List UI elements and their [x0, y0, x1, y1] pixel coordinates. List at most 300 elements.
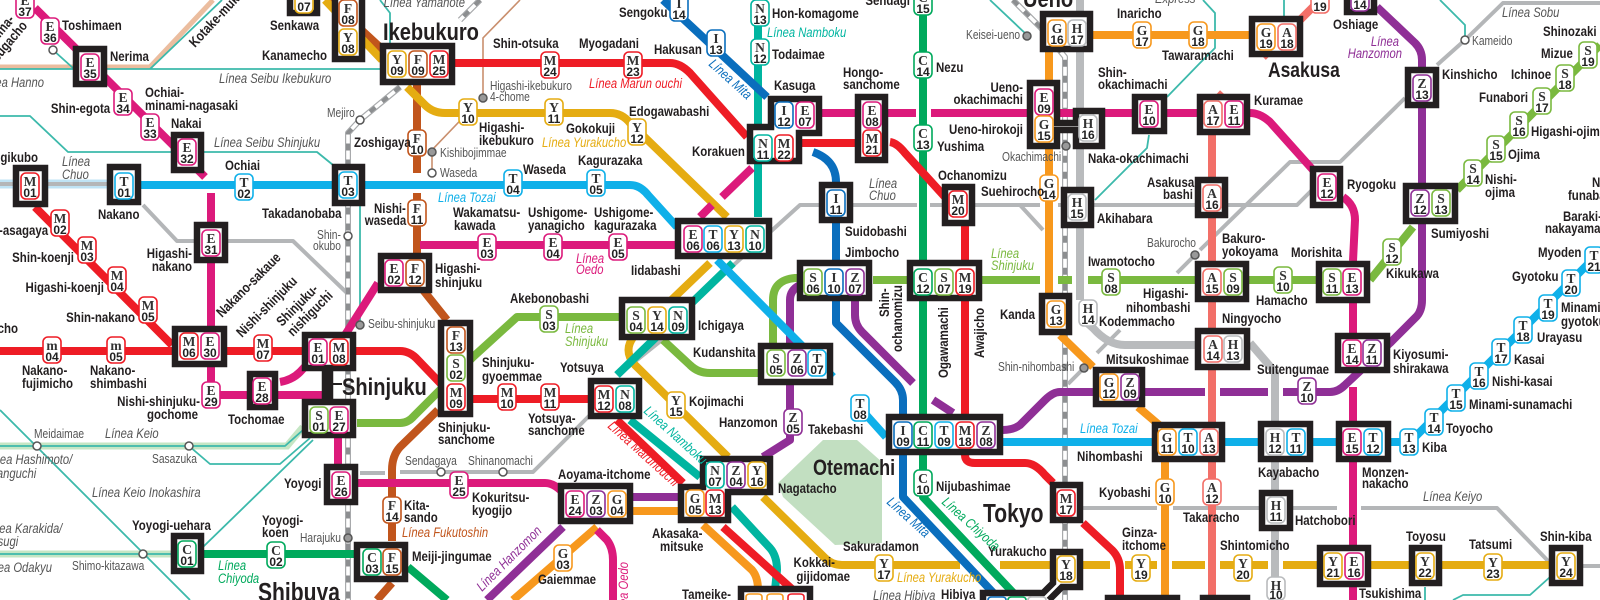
badge M11: 11: [544, 397, 557, 411]
station: Ikebukuro: 09: [411, 64, 425, 78]
badge E25: E: [454, 473, 464, 488]
badge F10: F: [413, 131, 421, 146]
name Mizue: Mizue: [1541, 45, 1573, 61]
name Ginza-itchome: [1122, 524, 1166, 553]
badge H14: H: [1083, 301, 1094, 316]
station badges: Nagatacho and Akasaka-mitsuke: Z: [731, 463, 741, 478]
name Shinozaki: Shinozaki: [1543, 23, 1597, 39]
badge C10: C: [918, 471, 928, 486]
name Sengoku: Sengoku: [619, 4, 667, 20]
station: Shin-okachimachi: E: [1144, 102, 1154, 117]
station: Kuramae: 11: [1228, 114, 1241, 128]
thin line station dots: [33, 32, 1469, 558]
name Awajicho: Awajicho: [971, 308, 987, 358]
station: Takadanobaba: 03: [341, 185, 355, 199]
line label Karakida: [0, 521, 64, 549]
station: Aoyama-itchome: 03: [589, 504, 603, 518]
station: Tsukishima: 16: [1347, 566, 1361, 580]
station badges: Korakuen and Kasuga: I: [781, 103, 787, 118]
name Takaracho: Takaracho: [1183, 509, 1240, 525]
badge G17: [1133, 22, 1151, 49]
station: Sumiyoshi: S: [1437, 191, 1445, 206]
badge T19: T: [1543, 296, 1553, 311]
badge M23: 23: [626, 65, 640, 79]
minor Shin-okubo: okubo: [313, 240, 341, 253]
line label Shinjuku centre: Shinjuku: [565, 334, 608, 349]
line label Seibu Shinjuku: Línea Seibu Shinjuku: [214, 135, 320, 150]
name Tokyo big: Tokyo: [983, 499, 1044, 527]
station: Ikebukuro: [383, 46, 452, 82]
station: Hongo-sanchome: M: [866, 131, 879, 146]
name Shinjuku-sanchome: [438, 419, 495, 447]
station: Ichigaya: 14: [650, 320, 664, 334]
name Gaiemmae: Gaiemmae: [538, 571, 596, 587]
badge T21: T: [1589, 248, 1599, 263]
station: Morishita: E: [1347, 270, 1357, 285]
badge T17: 17: [1494, 352, 1508, 366]
badge Y19: Y: [1136, 556, 1146, 571]
name Iidabashi: Iidabashi: [631, 262, 681, 278]
station: Otemachi: C: [918, 423, 928, 438]
name Ochiai-minami-nagasaki: minami-nagasaki: [145, 97, 238, 113]
name Ushigome-kagurazaka: [594, 204, 657, 233]
badge M02: M: [54, 211, 67, 226]
minor Shin-okubo: [313, 229, 341, 253]
station: Higashi-shinjuku: 02: [387, 273, 401, 287]
station: Tokyo: M: [1060, 491, 1073, 506]
station badges: Shinjuku: M: [333, 340, 346, 355]
badge S19: 19: [1581, 55, 1595, 69]
badge Y11: [545, 99, 563, 126]
minor Okachimachi: Okachimachi: [1002, 151, 1061, 164]
station: Aoyama-itchome: [561, 486, 630, 521]
line label Hanzomon east: Línea: [1371, 34, 1399, 49]
name Todaimae: Todaimae: [772, 46, 825, 62]
station: Kayabacho: [1261, 424, 1310, 459]
station: Hatchobori: 11: [1270, 510, 1283, 524]
name Higashi-shinjuku: shinjuku: [435, 274, 482, 290]
station: Jimbocho: 07: [848, 282, 862, 296]
station badges: Shinjuku: 27: [332, 420, 346, 434]
name Shin-egota: Shin-egota: [51, 100, 111, 116]
badge F10: 10: [410, 143, 424, 157]
station badges: Shinjuku: 08: [332, 352, 346, 366]
name Nishi-ojima: Nishi-: [1485, 171, 1517, 187]
station badges: Korakuen and Kasuga: E: [800, 103, 810, 118]
name Jimbocho: Jimbocho: [845, 244, 899, 260]
name Kasai: Kasai: [1514, 351, 1545, 367]
station: Kuramae: A: [1208, 102, 1218, 117]
station: Meiji-jingumae: C: [367, 550, 377, 565]
station: Ryogoku: E: [1322, 175, 1332, 190]
station: Aoyama-itchome: G: [612, 492, 623, 507]
station: Mitsukoshimae: Z: [1125, 375, 1135, 390]
badge M02: 02: [53, 223, 67, 237]
badge S08: 08: [1104, 282, 1118, 296]
name Monzen-nakacho: Monzen-: [1362, 464, 1409, 480]
Fukutoshin line: [329, 0, 447, 600]
badge T04: T: [508, 171, 518, 186]
station: Ginza: [1108, 598, 1177, 600]
line label Tozai west: Línea Tozai: [438, 190, 497, 205]
name Nakano-sakaue: Nakano-sakaue: [213, 249, 284, 320]
badge m04: 04: [45, 350, 59, 364]
badge Z05: Z: [788, 410, 798, 425]
station: Nakano: [110, 167, 138, 202]
station badges: Korakuen and Kasuga: M: [778, 136, 791, 151]
station: Iidabashi: 06: [686, 239, 700, 253]
line label Tozai east: Línea Tozai: [1080, 421, 1139, 436]
name Ushigome-kagurazaka: Ushigome-: [594, 204, 653, 220]
badge T21: [1585, 247, 1600, 274]
badge F11: [408, 200, 426, 227]
station: Kuramae: 17: [1206, 114, 1220, 128]
name Shinjuku-gyoemmae: Shinjuku-: [482, 354, 534, 370]
badge Y10: [459, 99, 477, 126]
badge S14: [1464, 160, 1482, 187]
Ueno-okachimachi interchange frame: [1030, 83, 1102, 146]
station: Iidabashi: E: [688, 227, 698, 242]
badge E05: E: [613, 235, 623, 250]
name Nakano: Nakano: [98, 206, 140, 222]
badge M10: [498, 384, 516, 411]
station: Iidabashi: Y: [729, 227, 739, 242]
badge T05: T: [591, 171, 601, 186]
name Shin-ochanomizu: Shin-: [876, 288, 892, 317]
station: Shinjuku-sanchome: F: [452, 328, 460, 343]
station: Kanda: G: [1051, 302, 1062, 317]
Hibiya line: [1080, 0, 1275, 600]
minor Kameido: Kameido: [1472, 35, 1512, 48]
badge T08: T: [855, 396, 865, 411]
minor Sendagaya: Sendagaya: [405, 455, 457, 468]
name Korakuen: Korakuen: [692, 143, 745, 159]
line label Shinjuku east: [991, 246, 1034, 273]
station: Ikebukuro: 09: [390, 64, 404, 78]
name Takadanobaba: Takadanobaba: [262, 205, 342, 221]
station: Nerima: [76, 49, 104, 84]
badge m04: m: [46, 338, 58, 353]
Shinjuku station connector tick: [330, 383, 342, 385]
badge E29: [202, 382, 220, 409]
name Higashi-koenji: Higashi-koenji: [26, 279, 104, 295]
name Tochomae: Tochomae: [228, 411, 285, 427]
station: Kanamecho: 08: [341, 13, 355, 27]
station: Nakai: [174, 135, 201, 170]
station: Iidabashi: 10: [748, 239, 762, 253]
name Higashi-nihombashi: Higashi-: [1143, 285, 1188, 301]
Namboku line: [617, 0, 777, 590]
name Kasuga: Kasuga: [774, 77, 816, 93]
badge M10: M: [501, 385, 514, 400]
station: Iidabashi: N: [750, 227, 760, 242]
minor Higashi-ikebukuro 4-chome: 4-chome: [490, 91, 530, 104]
line label Hanzomon east: Hanzomon: [1348, 46, 1402, 61]
badge Z10: 10: [1300, 391, 1314, 405]
line label Chiyoda west: Línea: [218, 558, 246, 573]
station: Senkawa: [290, 0, 317, 14]
station: Kanda: 13: [1049, 314, 1063, 328]
station: Ningyocho: 13: [1226, 349, 1240, 363]
name Shintomicho: Shintomicho: [1220, 537, 1290, 553]
badge T13: 13: [1402, 442, 1416, 456]
badge Y12: [628, 119, 646, 146]
badge M23: M: [627, 53, 640, 68]
station: Monzen-nakacho: 15: [1345, 442, 1359, 456]
name Nakano-shimbashi: shimbashi: [90, 375, 147, 391]
station badges: Nagatacho and Akasaka-mitsuke: N: [710, 463, 720, 478]
badge Y10: Y: [463, 100, 473, 115]
badge C14: C: [918, 53, 928, 68]
badge T19: 19: [1541, 308, 1555, 322]
name Tawaramachi: Tawaramachi: [1162, 47, 1234, 63]
station: Ogikubo: 01: [23, 186, 37, 200]
station: Yotsuya: [591, 381, 639, 416]
badge T17: [1492, 339, 1510, 366]
station: Ochanomizu: [945, 187, 972, 223]
name Kita-sando: [404, 497, 438, 525]
badge N12: 12: [753, 52, 767, 66]
line label Namboku north: Línea Namboku: [767, 25, 846, 40]
station: Ichigaya: N: [673, 308, 683, 323]
badge S12: 12: [1385, 252, 1399, 266]
badge M03: 03: [80, 250, 94, 264]
station: Yotsuya: 12: [597, 399, 611, 413]
station: Yotsuya: 08: [618, 399, 632, 413]
name Senkawa: Senkawa: [270, 17, 320, 33]
station: Mitsukoshimae: [1096, 370, 1142, 404]
name Nishi-ojima: [1485, 171, 1517, 200]
station: Shin-okachimachi: 10: [1142, 114, 1156, 128]
line label Shinjuku east: Línea: [991, 246, 1019, 261]
station: Hongo-sanchome: [858, 97, 885, 160]
station: Asakusabashi: A: [1207, 186, 1217, 201]
badge E37: 37: [18, 5, 32, 19]
name Higashi-nihombashi: nihombashi: [1126, 299, 1190, 315]
badge T02: T: [239, 175, 249, 190]
badge Y23: Y: [1488, 555, 1498, 570]
badge Z05: 05: [786, 422, 800, 436]
name Higashi-nakano: nakano: [152, 258, 192, 274]
Chiyoda line: [203, 0, 1020, 600]
station: Otemachi: T: [939, 423, 949, 438]
station: Shinjuku-sanchome: 13: [449, 340, 463, 354]
badge F14: [383, 497, 401, 524]
badge F10: [408, 130, 426, 157]
name Ushigome-kagurazaka: kagurazaka: [594, 217, 657, 233]
line label Chiyoda south: Línea Chiyoda: [939, 494, 1003, 554]
badge S10: S: [1279, 268, 1287, 283]
station: Kanda: [1042, 296, 1069, 332]
station: Kanamecho: 08: [341, 42, 355, 56]
station: Kayabacho: T: [1291, 430, 1301, 445]
badge G18: G: [1193, 23, 1204, 38]
station badges: Korakuen and Kasuga: 07: [798, 115, 812, 129]
badge I14: [670, 0, 688, 22]
station: Tsukishima: Y: [1328, 554, 1338, 569]
badge E33: [141, 114, 159, 141]
station badges: Ueno-okachimachi: 15: [1037, 129, 1051, 143]
name Toshimaen: Toshimaen: [62, 17, 122, 33]
badge M03: M: [81, 238, 94, 253]
badge S10: [1274, 267, 1292, 294]
station: Otemachi: 11: [917, 435, 930, 449]
badge C13: C: [918, 126, 928, 141]
badge M04: M: [111, 268, 124, 283]
station badges: Nagatacho and Akasaka-mitsuke: 05: [688, 503, 702, 517]
name Shin-okachimachi: Shin-: [1098, 64, 1127, 80]
Nagatacho interchange frame: [681, 459, 770, 520]
name Ushigome-yanagicho: yanagicho: [528, 217, 585, 233]
station: Kinshicho: 13: [1415, 88, 1429, 102]
station: Morishita: S: [1328, 270, 1336, 285]
badge S14: S: [1469, 161, 1477, 176]
name Kodemmacho: Kodemmacho: [1099, 313, 1175, 329]
name Ueno-hirokoji: Ueno-hirokoji: [949, 121, 1023, 137]
badge T02: [235, 174, 253, 201]
badges: Hibiya: [988, 597, 1046, 600]
name Wakamatsu-kawada: kawada: [454, 217, 496, 233]
station: Kiyosumi-shirakawa: 11: [1366, 353, 1379, 367]
name Asakusabashi: bashi: [1163, 186, 1193, 202]
name Shin-ochanomizu: [876, 285, 905, 352]
badge M07: 07: [256, 348, 270, 362]
badge C13: [914, 125, 932, 152]
station: Jimbocho: I: [831, 270, 837, 285]
station: Takaracho lower: [1203, 598, 1247, 600]
badge T18: 18: [1516, 330, 1530, 344]
station: Mitsukoshimae: 09: [1123, 387, 1137, 401]
name Shinjuku-gyoemmae: [482, 354, 542, 384]
station: Asakusabashi: 16: [1205, 198, 1219, 212]
badge Y15: [667, 392, 685, 419]
name Nijubashimae: Nijubashimae: [936, 478, 1011, 494]
badge E04: E: [548, 235, 558, 250]
badge S15: 15: [1489, 149, 1503, 163]
badge Y19: [1132, 555, 1150, 582]
station: Toyosu: Y: [1420, 554, 1430, 569]
station badges: Shinjuku: E: [313, 340, 323, 355]
badge E03: E: [482, 235, 492, 250]
name Shinjuku-sanchome: sanchome: [438, 431, 495, 447]
badge C02: C: [271, 543, 281, 558]
line label Marunouchi north: Línea Marun ouchi: [589, 76, 683, 91]
station: Ryogoku: [1313, 169, 1340, 205]
name Higashi-shinjuku: Higashi-: [435, 260, 480, 276]
Yurakucho line: [325, 0, 1549, 565]
line label Oedo north: Oedo: [576, 262, 603, 277]
station: Ochanomizu: 20: [951, 204, 965, 218]
badge F14: 14: [385, 510, 399, 524]
badge F11: F: [413, 201, 421, 216]
station: Kudanshita: 07: [810, 363, 824, 377]
badge S16: [1510, 112, 1528, 139]
name Kita-sando: sando: [404, 509, 438, 525]
badge S19: [1579, 42, 1597, 69]
station: Nakano: T: [119, 174, 129, 189]
station: Nihombashi: 11: [1161, 442, 1174, 456]
name Iwamotocho: Iwamotocho: [1088, 253, 1155, 269]
line label Keiyo: Línea Keiyo: [1423, 489, 1482, 504]
badge E37: [16, 0, 34, 19]
station: Jimbocho: 10: [827, 282, 841, 296]
name Nakano-shimbashi: Nakano-: [90, 362, 135, 378]
minor Bakurocho: Bakurocho: [1147, 237, 1196, 250]
badge Z10: [1298, 378, 1316, 405]
name Kanda: Kanda: [1000, 306, 1036, 322]
line label Sobu: Línea Sobu: [1502, 5, 1559, 20]
station: Kanamecho: [335, 0, 362, 59]
name Nishi-kasai: Nishi-kasai: [1492, 373, 1553, 389]
badge S03: 03: [542, 319, 556, 333]
badge T08: [851, 395, 869, 422]
station: Ogawamachi and Awajicho: 19: [958, 282, 972, 296]
station: Hatchobori: H: [1271, 498, 1282, 513]
station: Ikebukuro: F: [414, 52, 422, 67]
name Higashi-shinjuku: [435, 260, 482, 290]
badge S12: S: [1388, 240, 1396, 255]
badge S16: 16: [1512, 125, 1526, 139]
station badges: Shinjuku: 01: [311, 352, 325, 366]
badge S18: S: [1561, 66, 1569, 81]
station: Asakusa: A: [1282, 25, 1292, 40]
badge T17: T: [1496, 340, 1506, 355]
name Yoyogi-koen: Yoyogi-: [262, 512, 303, 528]
minor Higashi-ikebukuro 4-chome: Higashi-ikebukuro: [490, 80, 572, 93]
minor Harajuku: Harajuku: [300, 532, 341, 545]
name Nishi-ojima: ojima: [1485, 184, 1516, 200]
station: Shinjuku-sanchome: 02: [449, 368, 463, 382]
name Yoyogi: Yoyogi: [284, 475, 321, 491]
badge T13: T: [1404, 430, 1414, 445]
badge E36: 36: [43, 31, 57, 45]
name Akihabara: Akihabara: [1097, 210, 1153, 226]
name Asakusabashi: Asakusa: [1147, 174, 1195, 190]
name Shinjuku-nishiguchi: nishiguchi: [284, 287, 336, 339]
name Kokkai-gijidomae: [794, 554, 850, 584]
name Yotsuya: Yotsuya: [560, 359, 605, 375]
badge H10: H: [1271, 578, 1282, 593]
name Nakano-fujimicho: fujimicho: [22, 375, 73, 391]
badge A12: A: [1207, 480, 1217, 495]
badge Z05: [784, 409, 802, 436]
station: Monzen-nakacho: T: [1368, 430, 1378, 445]
name Waseda: Waseda: [523, 161, 567, 177]
name Nishi-funabashi: [1568, 174, 1600, 203]
badge T18: [1514, 317, 1532, 344]
line label Chuo centre: Línea: [869, 176, 897, 191]
station: Nihombashi: 13: [1202, 442, 1216, 456]
name Yurakucho: Yurakucho: [988, 543, 1047, 559]
station: Tsukishima: [1320, 548, 1368, 584]
Seibu Ikebukuro peach band: [0, 0, 213, 67]
name Bakuro-yokoyama: yokoyama: [1222, 243, 1279, 259]
name Hongo-sanchome: [843, 64, 900, 92]
name Funabori: Funabori: [1479, 89, 1528, 105]
badge E34: E: [118, 90, 128, 105]
badge C14: 14: [916, 65, 930, 79]
station badges: Nagatacho and Akasaka-mitsuke: 13: [708, 503, 722, 517]
name Takebashi: Takebashi: [808, 421, 863, 437]
station: Ichigaya: Y: [652, 308, 662, 323]
name Ginza-itchome: Ginza-: [1122, 524, 1157, 540]
station: Takadanobaba: [335, 167, 362, 203]
station badges: Shinjuku: [309, 339, 348, 434]
name Ginza-itchome: itchome: [1122, 537, 1166, 553]
name Nerima: Nerima: [110, 48, 150, 64]
station: Iidabashi: 06: [706, 239, 720, 253]
name Myoden: Myoden: [1538, 244, 1582, 260]
